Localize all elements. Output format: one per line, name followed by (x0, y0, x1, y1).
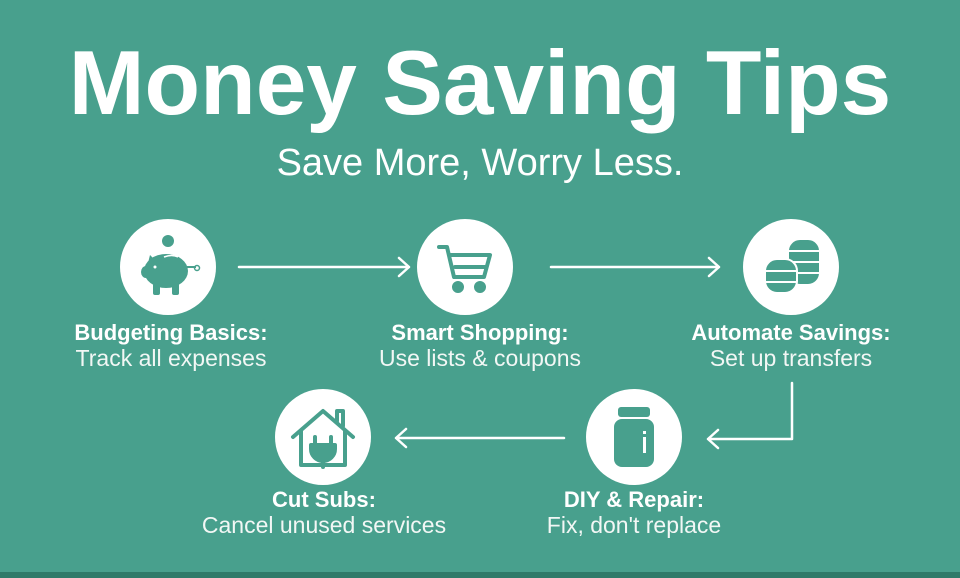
icon: coins (743, 219, 839, 315)
label: automate: Set up transfers (710, 345, 872, 371)
label: DIY: Fix, don't replace (547, 512, 721, 538)
icon: house with plug (275, 389, 371, 485)
subtitle: Save More, Worry Less. (277, 142, 683, 184)
bottom strip (0, 572, 960, 578)
arrow: DIY to cut subs (396, 429, 564, 447)
icon: shopping cart (417, 219, 513, 315)
label: budgeting: Track all expenses (76, 345, 266, 371)
label: smart shopping: Smart Shopping: (391, 320, 569, 345)
label: cut subs (202, 487, 446, 538)
arrow: budgeting to shopping (239, 258, 409, 276)
label: DIY (547, 487, 721, 538)
label: DIY: DIY & Repair: (564, 487, 704, 512)
label: budgeting (74, 320, 268, 371)
title: Money Saving Tips (69, 33, 891, 134)
label: smart shopping: Use lists & coupons (379, 345, 581, 371)
label: automate: Automate Savings: (691, 320, 891, 345)
arrow: shopping to automate (551, 258, 719, 276)
arrow: automate to DIY (708, 383, 792, 448)
icon: piggy bank (120, 219, 216, 315)
icon: jar (586, 389, 682, 485)
label: automate (691, 320, 891, 371)
label: cut subs: Cancel unused services (202, 512, 446, 538)
label: budgeting: Budgeting Basics: (74, 320, 268, 345)
label: smart shopping (379, 320, 581, 371)
label: cut subs: Cut Subs: (272, 487, 376, 512)
